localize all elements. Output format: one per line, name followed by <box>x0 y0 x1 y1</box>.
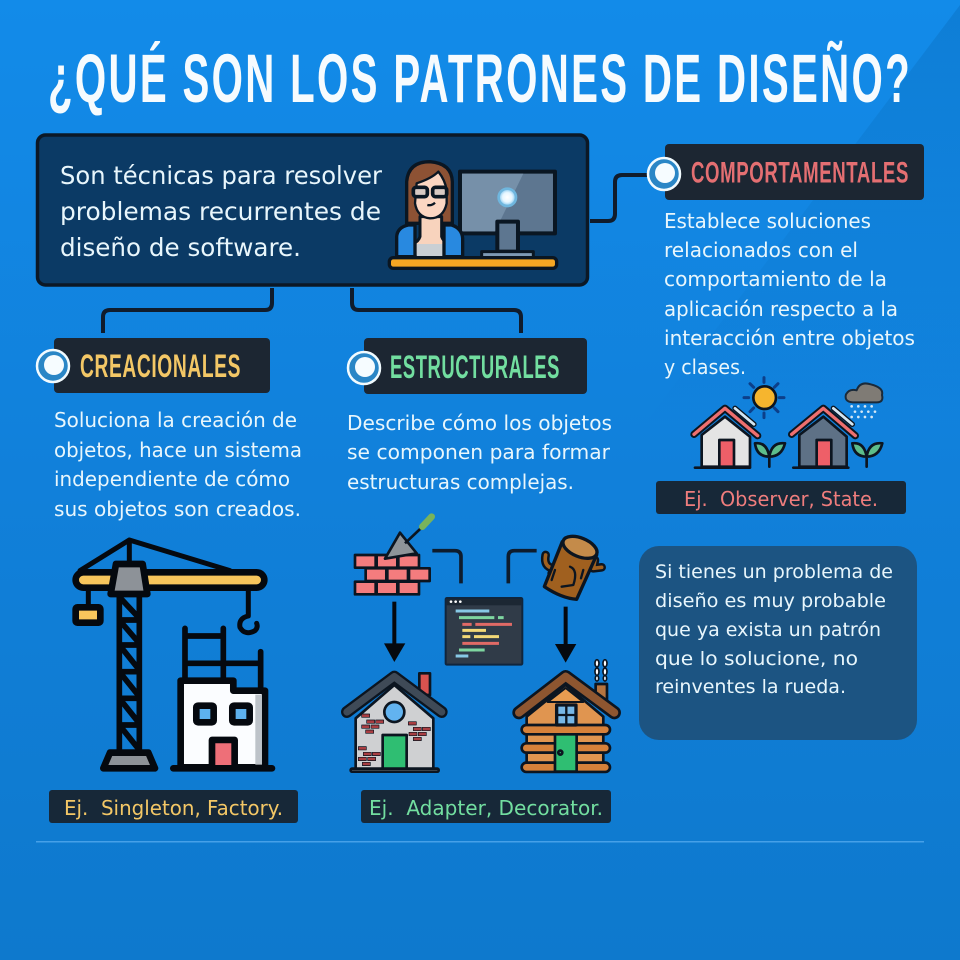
description: estructurales <box>347 411 612 494</box>
callout: advice: diseño es muy probable <box>655 590 886 612</box>
example: estructurales: Ej. Adapter, Decorator. <box>369 796 603 820</box>
description: estructurales: estructuras complejas. <box>347 470 574 494</box>
heading: estructurales <box>348 338 587 394</box>
example: creacionales: Ej. Singleton, Factory. <box>64 796 283 820</box>
example: creacionales <box>49 790 298 823</box>
callout: advice: que ya exista un patrón <box>655 619 881 641</box>
icon: rain cloud <box>846 383 882 418</box>
icon: log cabin <box>519 660 614 772</box>
description: comportamentales: Establece soluciones <box>664 209 871 233</box>
icon: developer at computer <box>389 162 557 268</box>
description: creacionales: objetos, hace un sistema <box>54 438 302 462</box>
connector lines to code window <box>432 551 537 583</box>
description: comportamentales: comportamiento de la <box>664 267 887 291</box>
icon: rainy house <box>792 408 882 468</box>
description: comportamentales <box>664 209 915 379</box>
example: comportamentales: Ej. Observer, State. <box>684 487 878 511</box>
arrow: log to cabin <box>555 607 576 663</box>
diagram: adapter pattern icons <box>347 517 614 772</box>
description: comportamentales: y clases. <box>664 355 746 379</box>
intro text: Son técnicas para resolver <box>60 161 383 190</box>
description: creacionales: Soluciona la creación de <box>54 408 297 432</box>
callout: advice: reinventes la rueda. <box>655 676 846 698</box>
panel: intro definition <box>38 135 588 285</box>
intro text: diseño de software. <box>60 233 301 262</box>
icon: brick house <box>347 673 442 772</box>
description: creacionales <box>54 408 302 521</box>
icon: bricks and trowel <box>355 517 432 594</box>
icon: sun <box>744 378 784 418</box>
example: estructurales <box>361 790 611 823</box>
panel: comportamentales <box>648 144 924 514</box>
connector lines from intro panel <box>103 175 650 333</box>
description: creacionales: independiente de cómo <box>54 467 290 491</box>
description: estructurales: Describe cómo los objetos <box>347 411 612 435</box>
panel: estructurales <box>347 338 614 823</box>
heading: creacionales: CREACIONALES <box>80 348 241 384</box>
description: comportamentales: relacionados con el <box>664 238 858 262</box>
icon: tree log <box>544 532 602 599</box>
description: creacionales: sus objetos son creados. <box>54 497 301 521</box>
heading: creacionales <box>37 338 270 393</box>
description: estructurales: se componen para formar <box>347 440 611 464</box>
callout: advice <box>639 546 917 740</box>
description: comportamentales: aplicación respecto a la <box>664 297 898 321</box>
icon: construction crane and building <box>76 540 272 768</box>
icon: code window <box>446 598 522 665</box>
panel: creacionales <box>37 338 302 823</box>
icon: sunny house <box>694 408 785 468</box>
intro text: problemas recurrentes de <box>60 197 381 226</box>
example: comportamentales <box>656 481 906 514</box>
heading: comportamentales <box>648 144 924 200</box>
heading: estructurales: ESTRUCTURALES <box>390 349 560 385</box>
callout: advice: Si tienes un problema de <box>655 561 893 583</box>
icon: houses in sun and rain <box>694 378 882 468</box>
intro text <box>60 161 383 262</box>
callout: advice: que lo solucione, no <box>655 648 858 670</box>
description: comportamentales: interacción entre objetos <box>664 326 915 350</box>
arrow: bricks to brick house <box>384 602 405 662</box>
